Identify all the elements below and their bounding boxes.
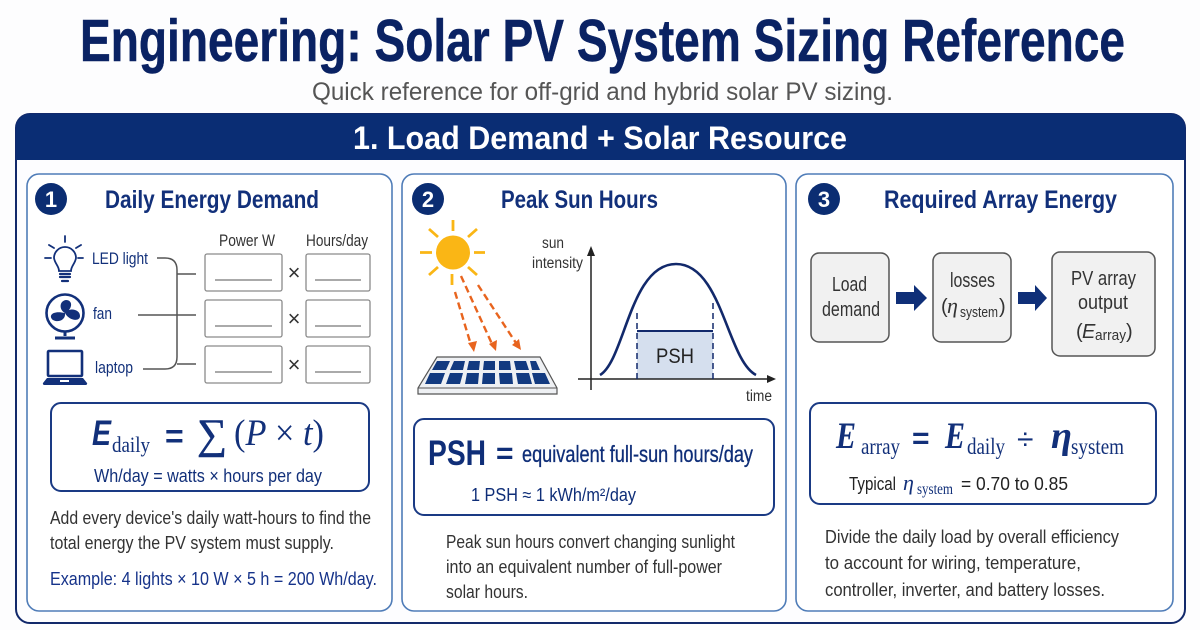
description: array energy: Divide the daily load by overall efficiency [825,527,1119,547]
formula box: array energy: E [835,416,856,457]
column headers: Power W [219,231,275,250]
flow box: losses: losses [950,270,995,292]
formula box: daily energy: Wh/day = watts × hours per day [94,466,322,486]
PSH bounds [637,303,713,379]
formula box: array energy: ÷ [1017,423,1033,456]
flow box: load demand: Load [832,274,867,296]
section header band [16,114,1185,160]
PSH area [637,331,713,379]
formula box: array energy: = [912,422,930,455]
panel: peak sun hours [402,174,786,611]
badge 2 [412,183,444,215]
card 2 border [402,174,786,611]
flow box: losses: ) [999,296,1006,318]
flow box: PV array output: output [1078,292,1128,314]
badge 1: 1 [45,187,57,212]
arrow: losses to output [1018,285,1047,311]
formula box: daily energy [51,403,369,491]
formula box: daily energy: ∑ [197,412,227,458]
formula box: array energy: system [917,481,953,498]
flow box: losses: ( [941,296,948,318]
chart: sun intensity curve: time [746,388,772,405]
flow box: load demand: demand [822,299,880,321]
card 1 border [27,174,392,611]
axes [578,252,769,390]
label: fan: fan [93,304,112,323]
formula box: array energy: = 0.70 to 0.85 [961,474,1068,494]
input grid: × [288,352,300,377]
icon: light bulb [45,236,83,281]
description: array energy: controller, inverter, and battery losses. [825,580,1105,600]
card 3 border [796,174,1173,611]
chart: sun intensity curve [532,235,776,405]
flow box: PV array output [1052,252,1155,356]
flow box: PV array output: array [1095,327,1126,344]
flow box: losses: system [960,304,998,321]
description: daily energy: total energy the PV system must supply. [50,533,334,553]
example: Example: 4 lights × 10 W × 5 h = 200 Wh/day. [50,569,377,589]
formula box: array energy: η [1051,415,1072,457]
flow box: losses: η [947,293,958,318]
formula box: array energy: E [944,416,965,457]
formula box: PSH: 1 PSH ≈ 1 kWh/m²/day [471,485,636,505]
panel: daily energy demand [27,174,392,611]
formula box: array energy: array [861,434,900,459]
description: array energy [825,527,1119,600]
column headers [219,231,368,250]
section frame [16,114,1185,623]
label: LED light: LED light [92,249,148,268]
input grid: × [288,306,300,331]
formula box: PSH: equivalent full-sun hours/day [522,441,753,467]
sun rays [455,276,521,352]
section header band: 1. Load Demand + Solar Resource [353,120,847,156]
formula box: daily energy: = [165,418,184,454]
description: peak sun hours [446,532,735,602]
heading: required array energy: Required Array Energy [884,186,1117,214]
formula box: PSH: PSH [428,434,486,473]
flow box: PV array output: ) [1126,321,1133,343]
formula box: array energy: η [903,470,914,495]
description: array energy: to account for wiring, temperature, [825,553,1081,573]
input grid: × [288,260,300,285]
chart: sun intensity curve: sun [542,235,564,252]
heading: peak sun hours: Peak Sun Hours [501,186,658,214]
icon: solar panel [418,357,557,394]
formula box: PSH: = [496,437,514,470]
flow box: PV array output: ( [1076,321,1083,343]
formula box: PSH [414,419,774,515]
flow box: losses [933,253,1011,342]
description: peak sun hours: into an equivalent number of full-power [446,557,722,577]
connector bracket [138,258,196,369]
column headers: Hours/day [306,231,368,250]
formula box: daily energy: daily [112,432,150,457]
formula box: array energy: daily [967,434,1005,459]
flow box: PV array output: PV array [1071,268,1136,290]
flow box: PV array output: E [1082,321,1096,343]
panel: required array energy [796,174,1173,611]
description: peak sun hours: Peak sun hours convert changing sunlight [446,532,735,552]
badge 3: 3 [818,187,830,212]
formula box: array energy: Typical [849,474,896,494]
flow box: load demand [811,253,889,342]
badge 1 [35,183,67,215]
label: laptop: laptop [95,358,133,377]
panel: load demand and solar resource [16,114,1185,623]
subtitle: Quick reference for off-grid and hybrid solar PV sizing. [312,78,893,106]
formula box: daily energy: (P × t) [234,413,324,454]
input grid [205,254,370,383]
formula box: daily energy: E [92,414,112,453]
heading: daily energy demand: Daily Energy Demand [105,186,319,214]
intensity curve [600,264,756,375]
chart: sun intensity curve: PSH [656,345,694,368]
description: daily energy: Add every device's daily watt-hours to find the [50,508,371,528]
chart: sun intensity curve: intensity [532,255,583,272]
icon: sun [420,220,485,285]
description: daily energy [50,508,371,553]
icon: laptop [43,351,87,385]
formula box: array energy [810,403,1156,504]
description: peak sun hours: solar hours. [446,582,528,602]
badge 3 [808,183,840,215]
formula box: array energy: system [1071,434,1124,459]
icon: fan [46,294,84,338]
badge 2: 2 [422,187,434,212]
arrow: demand to losses [896,285,927,311]
